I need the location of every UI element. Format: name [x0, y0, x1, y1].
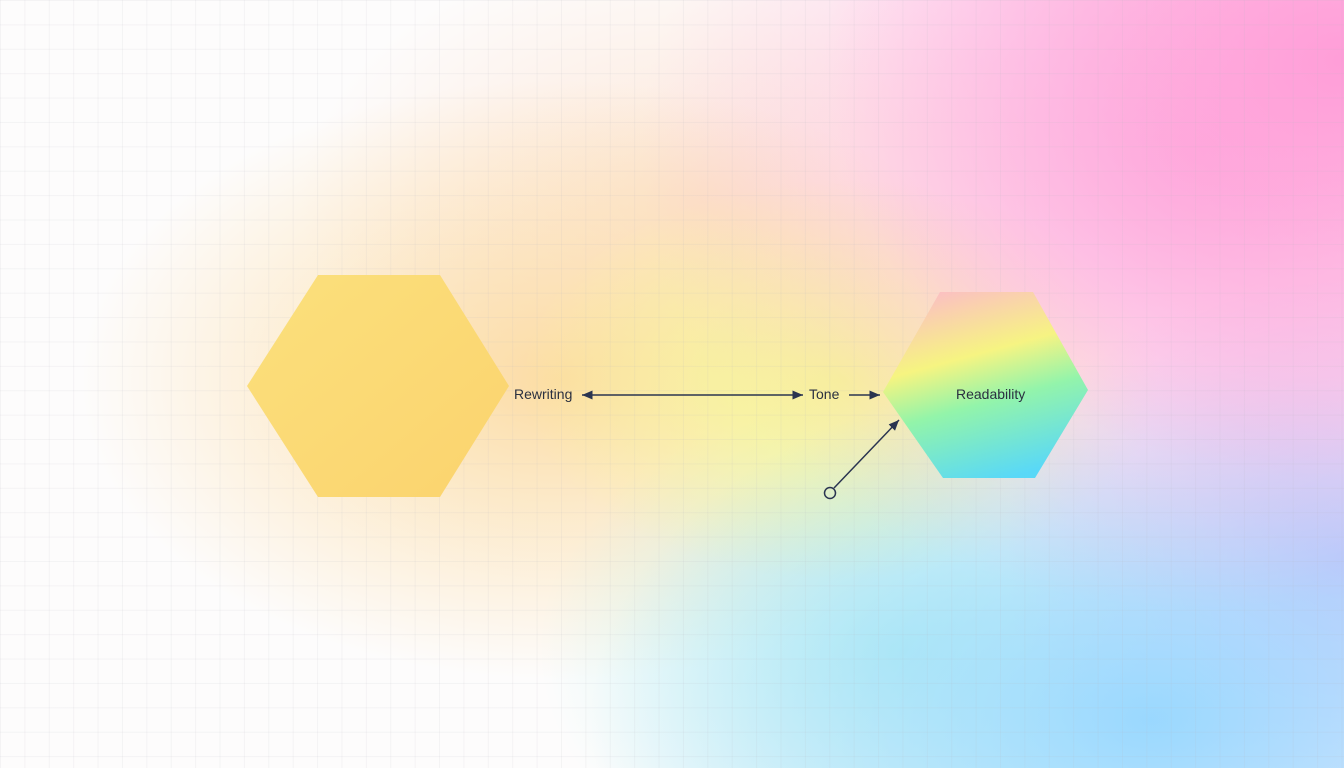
arrow: circle to readability [824, 420, 899, 498]
label: Readability: Readability [956, 386, 1025, 402]
label: Tone: Tone [809, 386, 839, 402]
arrow: rewriting to tone [582, 394, 803, 396]
hexagon: readability [883, 292, 1088, 478]
arrow: tone to readability [849, 394, 880, 396]
hexagon: yellow [247, 275, 509, 497]
label: Rewriting: Rewriting [514, 386, 572, 402]
